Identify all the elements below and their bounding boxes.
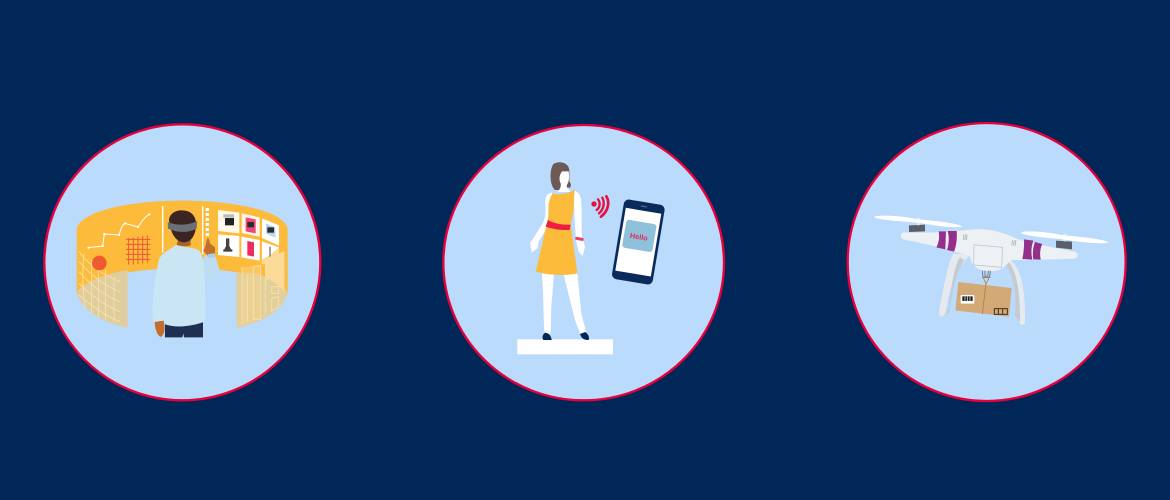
panel: smart mannequin [443,125,724,400]
neck [177,240,191,246]
left hand [155,321,165,337]
parcel clamp [982,271,990,277]
orange circle [92,256,107,270]
panel: augmented reality shopper [44,124,320,400]
person seen from behind [153,210,220,337]
product cards [218,210,279,261]
barcode label [961,295,974,304]
hair [551,162,569,190]
circle background [443,125,724,400]
light lines on right panel [242,265,284,324]
drone body [901,229,1078,271]
vertical dividers [162,206,209,254]
hello text: Hello [629,231,649,243]
legs [542,273,554,335]
box marking [994,309,1007,314]
shoes [543,333,552,340]
purple stripes [936,231,1042,260]
red belt [546,220,571,230]
jeans [165,322,203,337]
panel: delivery drone [848,123,1126,401]
right propeller [1021,231,1109,249]
pointing hand [203,238,215,256]
arms [530,193,552,253]
wifi signal icon [591,196,608,217]
smartphone [611,199,665,285]
face and neck [557,171,571,192]
circle background [44,124,320,400]
drone legs [939,253,1025,325]
head and hair [169,210,196,242]
parcel box [955,276,1012,317]
white pedestal [517,339,613,354]
mannequin figure [530,162,589,340]
small vents [963,234,1016,246]
raised arm [200,254,220,280]
line chart [87,213,150,249]
dress [536,190,577,275]
heat grid [126,235,150,265]
left propeller [874,216,962,232]
shirt [153,245,205,326]
headset [168,221,197,232]
grid on left panel [79,252,120,323]
wrist band [575,237,584,241]
circle background [848,123,1126,401]
curved yellow display [77,201,288,328]
